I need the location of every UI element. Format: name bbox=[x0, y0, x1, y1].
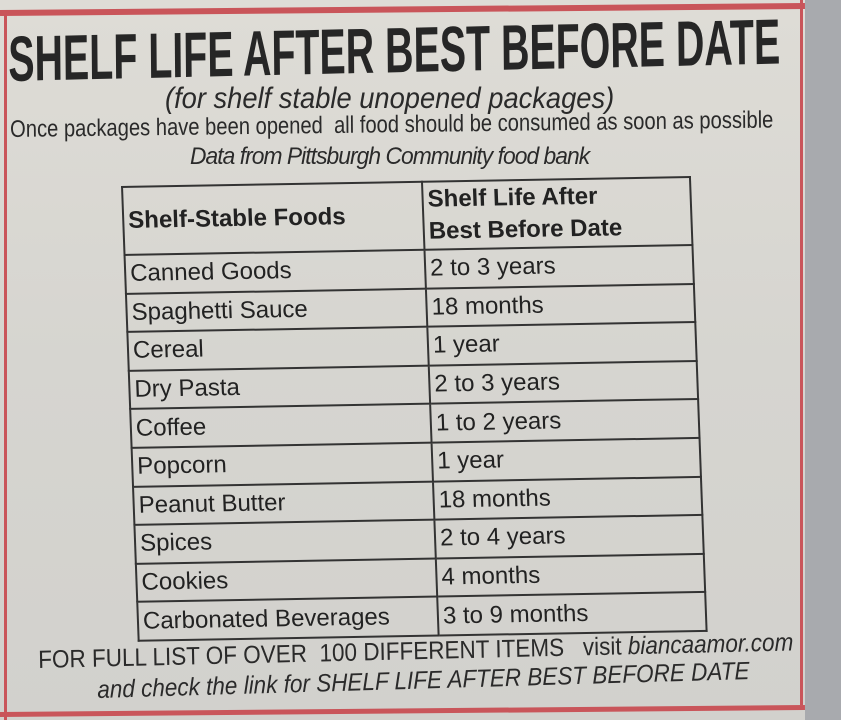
table header: 18 months bbox=[438, 484, 551, 513]
table header: 2 to 3 years bbox=[430, 253, 556, 282]
table header: 1 to 2 years bbox=[435, 407, 562, 436]
table header: 18 months bbox=[431, 292, 544, 320]
table header: Spaghetti Sauce bbox=[131, 296, 308, 326]
table header: Cereal bbox=[133, 336, 204, 364]
table header: 3 to 9 months bbox=[442, 600, 589, 629]
table header: Cookies bbox=[141, 567, 229, 596]
footer line 2: and check the link for SHELF LIFE AFTER BEST BEFORE DATE bbox=[97, 657, 750, 704]
table header: Peanut Butter bbox=[138, 489, 286, 519]
table header: 2 to 4 years bbox=[440, 523, 566, 552]
table header: 2 to 3 years bbox=[434, 368, 560, 398]
note text: Once packages have been opened all food should be consumed as soon as possible bbox=[10, 106, 773, 143]
table header: Dry Pasta bbox=[134, 374, 240, 403]
table header: 1 year bbox=[433, 331, 500, 359]
subtitle: (for shelf stable unopened packages) bbox=[165, 82, 614, 115]
title: SHELF LIFE AFTER BEST BEFORE DATE bbox=[8, 5, 780, 95]
table header bbox=[128, 183, 623, 634]
table bbox=[121, 176, 708, 642]
source text: Data from Pittsburgh Community food bank bbox=[190, 143, 589, 170]
table header: Shelf-Stable Foods bbox=[128, 203, 346, 234]
table header: 4 months bbox=[441, 562, 541, 591]
table header: Coffee bbox=[135, 413, 207, 441]
table header: Shelf Life After bbox=[427, 183, 598, 213]
table header: Carbonated Beverages bbox=[142, 603, 390, 634]
table header: Best Before Date bbox=[428, 214, 623, 245]
table header: Spices bbox=[140, 529, 213, 557]
footer line 1: FOR FULL LIST OF OVER 100 DIFFERENT ITEMS visit biancaamor.com bbox=[38, 628, 794, 674]
table header: Popcorn bbox=[137, 451, 227, 480]
table header: Canned Goods bbox=[130, 257, 292, 287]
table header: 1 year bbox=[437, 447, 504, 475]
